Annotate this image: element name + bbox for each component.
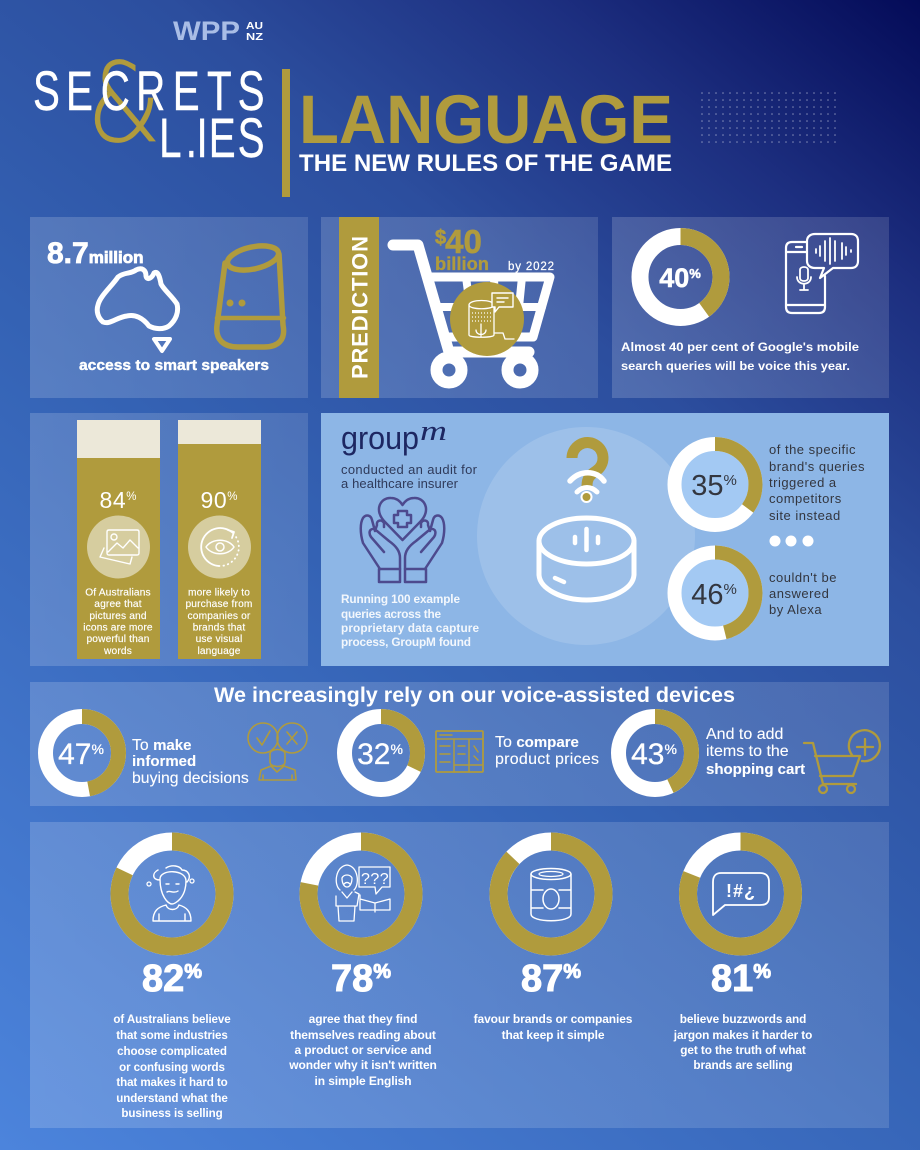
icon: jargon speech bubble bbox=[713, 873, 769, 915]
label: informed bbox=[132, 753, 196, 770]
label: items to the bbox=[706, 743, 789, 760]
intro text: a healthcare insurer bbox=[341, 476, 459, 491]
bar: 84 percent bbox=[77, 420, 160, 659]
body text: Almost 40 per cent of Google's mobile bbox=[621, 340, 859, 354]
donut chart: 43%: % bbox=[664, 741, 677, 757]
panel: plain language bbox=[30, 822, 889, 1128]
label: 35%: site instead bbox=[769, 508, 841, 523]
label: 35%: of the specific bbox=[769, 442, 856, 457]
WPP AUNZ logo: AU bbox=[246, 20, 263, 32]
donut chart: 35%: 35 bbox=[691, 470, 723, 502]
icon: woman reading bbox=[336, 865, 390, 921]
donut chart: 35%: % bbox=[723, 472, 737, 489]
donut chart: 43% bbox=[618, 716, 692, 790]
icon: confused person bbox=[147, 866, 194, 921]
bar: 84 percent: Of Australians bbox=[85, 588, 151, 598]
stat: $40 billion: billion bbox=[435, 253, 489, 274]
icon: jargon speech bubble: !#¿ bbox=[726, 881, 756, 901]
body text: search queries will be voice this year. bbox=[621, 359, 850, 373]
bar: 90 percent: language bbox=[197, 646, 241, 657]
three dots bbox=[770, 536, 814, 546]
icon: phone with voice bbox=[786, 234, 858, 313]
donut chart: 47% bbox=[46, 716, 118, 790]
WPP AUNZ logo bbox=[173, 16, 264, 46]
label: buying decisions bbox=[132, 770, 249, 787]
label: 46%: couldn't be bbox=[769, 570, 837, 585]
stat column: 78%: themselves reading about bbox=[290, 1028, 436, 1042]
title: Secrets & Lies bbox=[33, 39, 264, 170]
icon: add to cart bbox=[804, 730, 880, 793]
bar: 90 percent: purchase from bbox=[185, 599, 253, 610]
donut chart: 32%: % bbox=[390, 741, 403, 757]
label: And to add bbox=[706, 726, 783, 743]
bar: 84 percent: powerful than bbox=[86, 634, 150, 645]
panel: smart speakers bbox=[30, 217, 308, 398]
stat column: 81% bbox=[673, 842, 812, 1072]
stat column: 78%: agree that they find bbox=[309, 1012, 417, 1026]
panel: visual language bbox=[30, 413, 308, 666]
icon: shopping cart bbox=[393, 245, 550, 382]
icon: price table bbox=[436, 731, 483, 772]
bar: 84 percent: pictures and bbox=[89, 611, 147, 622]
stat column: 82% bbox=[113, 842, 231, 1120]
caption: access to smart speakers bbox=[79, 357, 269, 374]
stat column: 78% bbox=[288, 842, 437, 1088]
title: Secrets & Lies: & bbox=[87, 39, 161, 167]
finding text: proprietary data capture bbox=[341, 621, 479, 635]
donut chart: 40%: 40 bbox=[659, 263, 689, 293]
logo: GroupM: group bbox=[341, 420, 419, 456]
label: 35%: brand's queries bbox=[769, 459, 865, 474]
donut chart: 35% bbox=[674, 444, 756, 525]
title: Secrets & Lies: SECRETS bbox=[33, 61, 264, 123]
donut chart: 46%: 46 bbox=[691, 579, 723, 611]
panel: GroupM audit bbox=[321, 413, 889, 666]
label: product prices bbox=[495, 751, 599, 768]
stat column: 82%: 82 bbox=[142, 958, 184, 1000]
stat column: 87% bbox=[474, 842, 633, 1042]
subheading: THE NEW RULES OF THE GAME bbox=[299, 150, 672, 177]
finding text: process, GroupM found bbox=[341, 635, 471, 649]
donut chart: 46% bbox=[674, 552, 756, 634]
icon: woman reading: ??? bbox=[361, 871, 389, 888]
label: To compare bbox=[495, 734, 579, 751]
icon: Australia map bbox=[97, 269, 178, 351]
panel: prediction bbox=[321, 217, 598, 398]
heading: Language: LANGUAGE bbox=[299, 81, 673, 158]
stat column: 87%: % bbox=[563, 961, 581, 983]
label: 35%: competitors bbox=[769, 491, 842, 506]
panel: voice search bbox=[612, 217, 889, 398]
icon: decision maker bbox=[248, 723, 307, 780]
stat column: 81%: brands are selling bbox=[693, 1058, 793, 1072]
bar: 90 percent: % bbox=[227, 491, 238, 503]
stat column: 81%: believe buzzwords and bbox=[680, 1012, 806, 1026]
icon: speaker in gold circle bbox=[450, 282, 524, 356]
label: To make bbox=[132, 737, 191, 754]
donut chart: 43%: 43 bbox=[631, 738, 664, 771]
donut chart: 32%: 32 bbox=[357, 738, 390, 771]
stat column: 78%: in simple English bbox=[315, 1074, 411, 1088]
stat column: 82%: % bbox=[184, 961, 202, 983]
donut chart: 47%: 47 bbox=[58, 738, 91, 771]
label: 35%: triggered a bbox=[769, 475, 837, 490]
donut chart: 40% bbox=[640, 236, 721, 318]
WPP AUNZ logo: WPP bbox=[173, 16, 240, 46]
gold divider bar bbox=[282, 69, 290, 197]
bar: 90 percent: use visual bbox=[196, 634, 242, 645]
stat column: 82%: of Australians believe bbox=[113, 1013, 231, 1026]
donut chart: 47%: % bbox=[91, 741, 104, 757]
bar: 84 percent: words bbox=[103, 646, 132, 657]
intro text: conducted an audit for bbox=[341, 462, 478, 477]
icon: tin can bbox=[531, 868, 571, 921]
logo: GroupM: m bbox=[420, 416, 447, 447]
stat column: 82%: that some industries bbox=[116, 1029, 228, 1042]
by 2022: by 2022 bbox=[508, 261, 554, 273]
title: Secrets & Lies: L.IES bbox=[159, 108, 264, 170]
prediction band: PREDICTION bbox=[348, 236, 372, 379]
icon: smart speaker bbox=[217, 242, 284, 347]
stat column: 81%: % bbox=[753, 961, 771, 983]
stat column: 82%: or confusing words bbox=[119, 1061, 225, 1074]
donut chart: 32% bbox=[344, 716, 418, 790]
heading: We increasingly rely on our voice-assisted devices bbox=[214, 683, 735, 707]
stat column: 78%: a product or service and bbox=[295, 1043, 431, 1057]
stat column: 78%: 78 bbox=[331, 958, 373, 1000]
stat column: 82%: that makes it hard to bbox=[116, 1076, 228, 1089]
bar: 90 percent bbox=[178, 420, 261, 659]
stat column: 78%: wonder why it isn't written bbox=[288, 1058, 437, 1072]
stat column: 82%: choose complicated bbox=[117, 1045, 227, 1058]
icon: eye bbox=[188, 516, 251, 578]
WPP AUNZ logo: NZ bbox=[246, 31, 264, 43]
stat: $40 billion bbox=[435, 223, 489, 274]
stat: $40 billion: 40 bbox=[445, 223, 482, 260]
label: 46%: answered bbox=[769, 586, 829, 601]
panel: voice-assisted devices bbox=[30, 682, 889, 806]
bar: 84 percent: icons are more bbox=[83, 622, 153, 634]
bar: 84 percent: 84 bbox=[99, 487, 126, 513]
label: shopping cart bbox=[706, 761, 805, 778]
stat column: 87%: 87 bbox=[521, 958, 563, 1000]
bar: 84 percent: % bbox=[126, 491, 137, 503]
stat column: 81%: get to the truth of what bbox=[680, 1043, 806, 1057]
icon: voice puck with question bbox=[539, 443, 634, 600]
prediction band bbox=[339, 217, 379, 398]
stat: 8.7 million: 8.7million bbox=[47, 237, 144, 270]
donut chart: 46%: % bbox=[723, 581, 737, 598]
logo: GroupM bbox=[341, 416, 447, 456]
label: 46%: by Alexa bbox=[769, 602, 822, 617]
icon: caring hands bbox=[361, 498, 444, 582]
donut chart: 40%: % bbox=[689, 266, 701, 281]
stat column: 82%: understand what the bbox=[116, 1092, 228, 1105]
stat column: 87%: favour brands or companies bbox=[474, 1012, 633, 1026]
dot grid decoration bbox=[698, 87, 840, 144]
finding text: queries across the bbox=[341, 607, 441, 621]
bar: 90 percent: companies or bbox=[188, 611, 251, 622]
stat: $40 billion: $ bbox=[435, 227, 446, 249]
stat column: 81%: jargon makes it harder to bbox=[673, 1028, 812, 1042]
stat column: 82%: business is selling bbox=[121, 1107, 223, 1120]
stat column: 81%: 81 bbox=[711, 958, 753, 1000]
bar: 90 percent: 90 bbox=[200, 487, 227, 513]
bar: 90 percent: more likely to bbox=[188, 588, 250, 598]
bar: 90 percent: brands that bbox=[193, 622, 245, 634]
stat column: 87%: that keep it simple bbox=[502, 1028, 605, 1042]
bar: 84 percent: agree that bbox=[94, 599, 142, 610]
finding text: Running 100 example bbox=[341, 592, 460, 606]
stat column: 78%: % bbox=[373, 961, 391, 983]
icon: pictures bbox=[87, 516, 150, 578]
